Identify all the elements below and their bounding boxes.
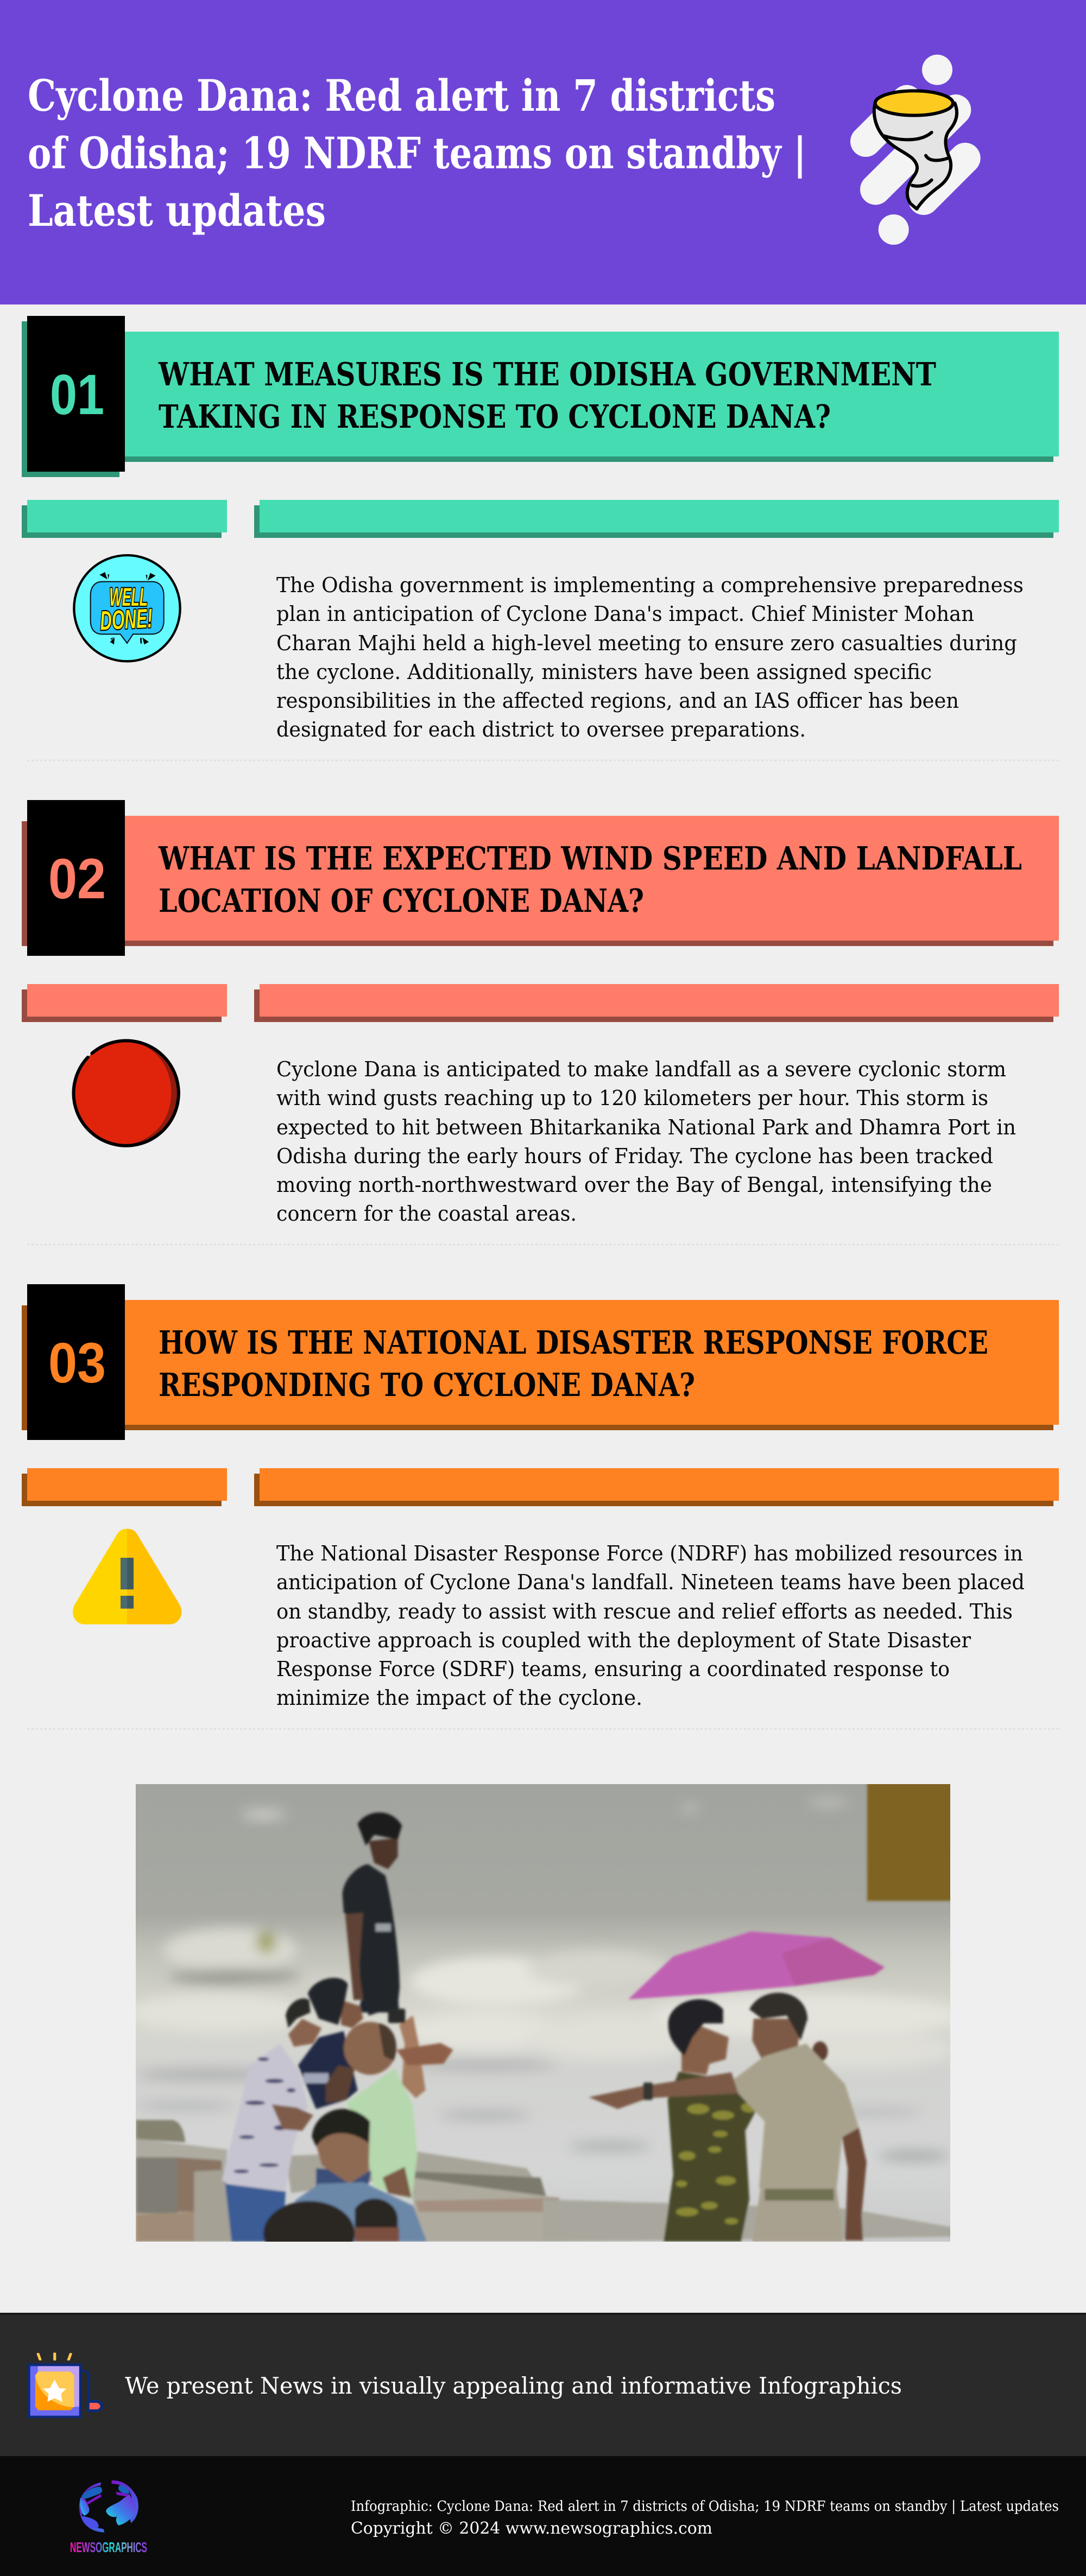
heading bar 03 (22, 1284, 1059, 1440)
left half of the photo (136, 1812, 559, 2267)
body text 03: Response Force (SDRF) teams, ensuring a coordinated response to (276, 1657, 950, 1681)
title: Latest updates (28, 185, 326, 236)
body text 03: minimize the impact of the cyclone. (276, 1686, 642, 1710)
heading bar 02: 02 (48, 847, 106, 911)
body text 02: moving north-northwestward over the Bay of Bengal, intensifying the (276, 1173, 992, 1197)
icon: warning triangle (73, 1529, 181, 1625)
heading bar 01: TAKING IN RESPONSE TO CYCLONE DANA? (159, 398, 831, 435)
icon: red circle (74, 1040, 180, 1146)
body text 01: responsibilities in the affected regions, and an IAS officer has been (276, 689, 959, 713)
body text 03: anticipation of Cyclone Dana's landfall. Nineteen teams have been placed (276, 1570, 1025, 1594)
body text 01: Charan Majhi held a high-level meeting to ensure zero casualties during (276, 631, 1017, 655)
body text 02 (276, 1057, 1016, 1226)
heading bar 01: 01 (50, 363, 104, 427)
body text 03: proactive approach is coupled with the deployment of State Disaster (276, 1628, 971, 1652)
title: of Odisha; 19 NDRF teams on standby | (28, 128, 806, 179)
heading bar 03: 03 (48, 1331, 106, 1395)
body text 01: plan in anticipation of Cyclone Dana's impact. Chief Minister Mohan (276, 602, 974, 626)
heading bar 02 (22, 800, 1059, 956)
body text 01 (276, 573, 1024, 741)
body text 01: designated for each district to oversee preparations. (276, 718, 806, 741)
section 03 (22, 1284, 1059, 1729)
photo: people on the seafront under stormy waves (130, 1782, 961, 2267)
body text 01: The Odisha government is implementing a comprehensive preparedness (276, 573, 1024, 597)
body text 02: concern for the coastal areas. (276, 1202, 577, 1226)
body text 02: with wind gusts reaching up to 120 kilometers per hour. This storm is (276, 1086, 988, 1110)
footer text (351, 2498, 1059, 2538)
body text 02: Odisha during the early hours of Friday. The cyclone has been tracked (276, 1144, 993, 1168)
heading bar 02: LOCATION OF CYCLONE DANA? (159, 882, 644, 919)
heading bar 01: WHAT MEASURES IS THE ODISHA GOVERNMENT (158, 356, 936, 393)
section 02 (22, 800, 1059, 1245)
body text 03 (276, 1541, 1025, 1710)
body text 02: Cyclone Dana is anticipated to make landfall as a severe cyclonic storm (276, 1057, 1006, 1081)
title (28, 70, 806, 236)
icon: tornado (866, 55, 965, 245)
heading bar 01 (22, 316, 1059, 477)
icon: well done badge: WELL (109, 583, 148, 612)
logo: newsographics: NEWSOGRAPHICS (70, 2539, 147, 2555)
footer band (0, 2456, 1086, 2576)
sub-bars 01 (22, 500, 1059, 538)
body text 03: The National Disaster Response Force (NDRF) has mobilized resources in (276, 1541, 1023, 1565)
footer text: Copyright © 2024 www.newsographics.com (351, 2519, 712, 2538)
logo: newsographics (70, 2480, 147, 2555)
body text 01: the cyclone. Additionally, ministers have been assigned specific (276, 660, 932, 684)
body text 03: on standby, ready to assist with rescue and relief efforts as needed. This (276, 1600, 1013, 1623)
title: Cyclone Dana: Red alert in 7 districts (28, 70, 775, 121)
tagline text: We present News in visually appealing and informative Infographics (125, 2372, 902, 2399)
icon: well done badge (74, 555, 180, 661)
icon: newspaper star (28, 2352, 103, 2418)
sub-bars 02 (22, 984, 1059, 1022)
header panel (0, 0, 1086, 304)
icon: well done badge: DONE! (99, 604, 153, 636)
heading bar 03: RESPONDING TO CYCLONE DANA? (159, 1366, 695, 1404)
tagline band (0, 2313, 1086, 2456)
body text 02: expected to hit between Bhitarkanika National Park and Dhamra Port in (276, 1115, 1016, 1139)
sub-bars 03 (22, 1468, 1059, 1506)
right half of the photo (543, 1782, 953, 2242)
section 01 (22, 316, 1059, 760)
